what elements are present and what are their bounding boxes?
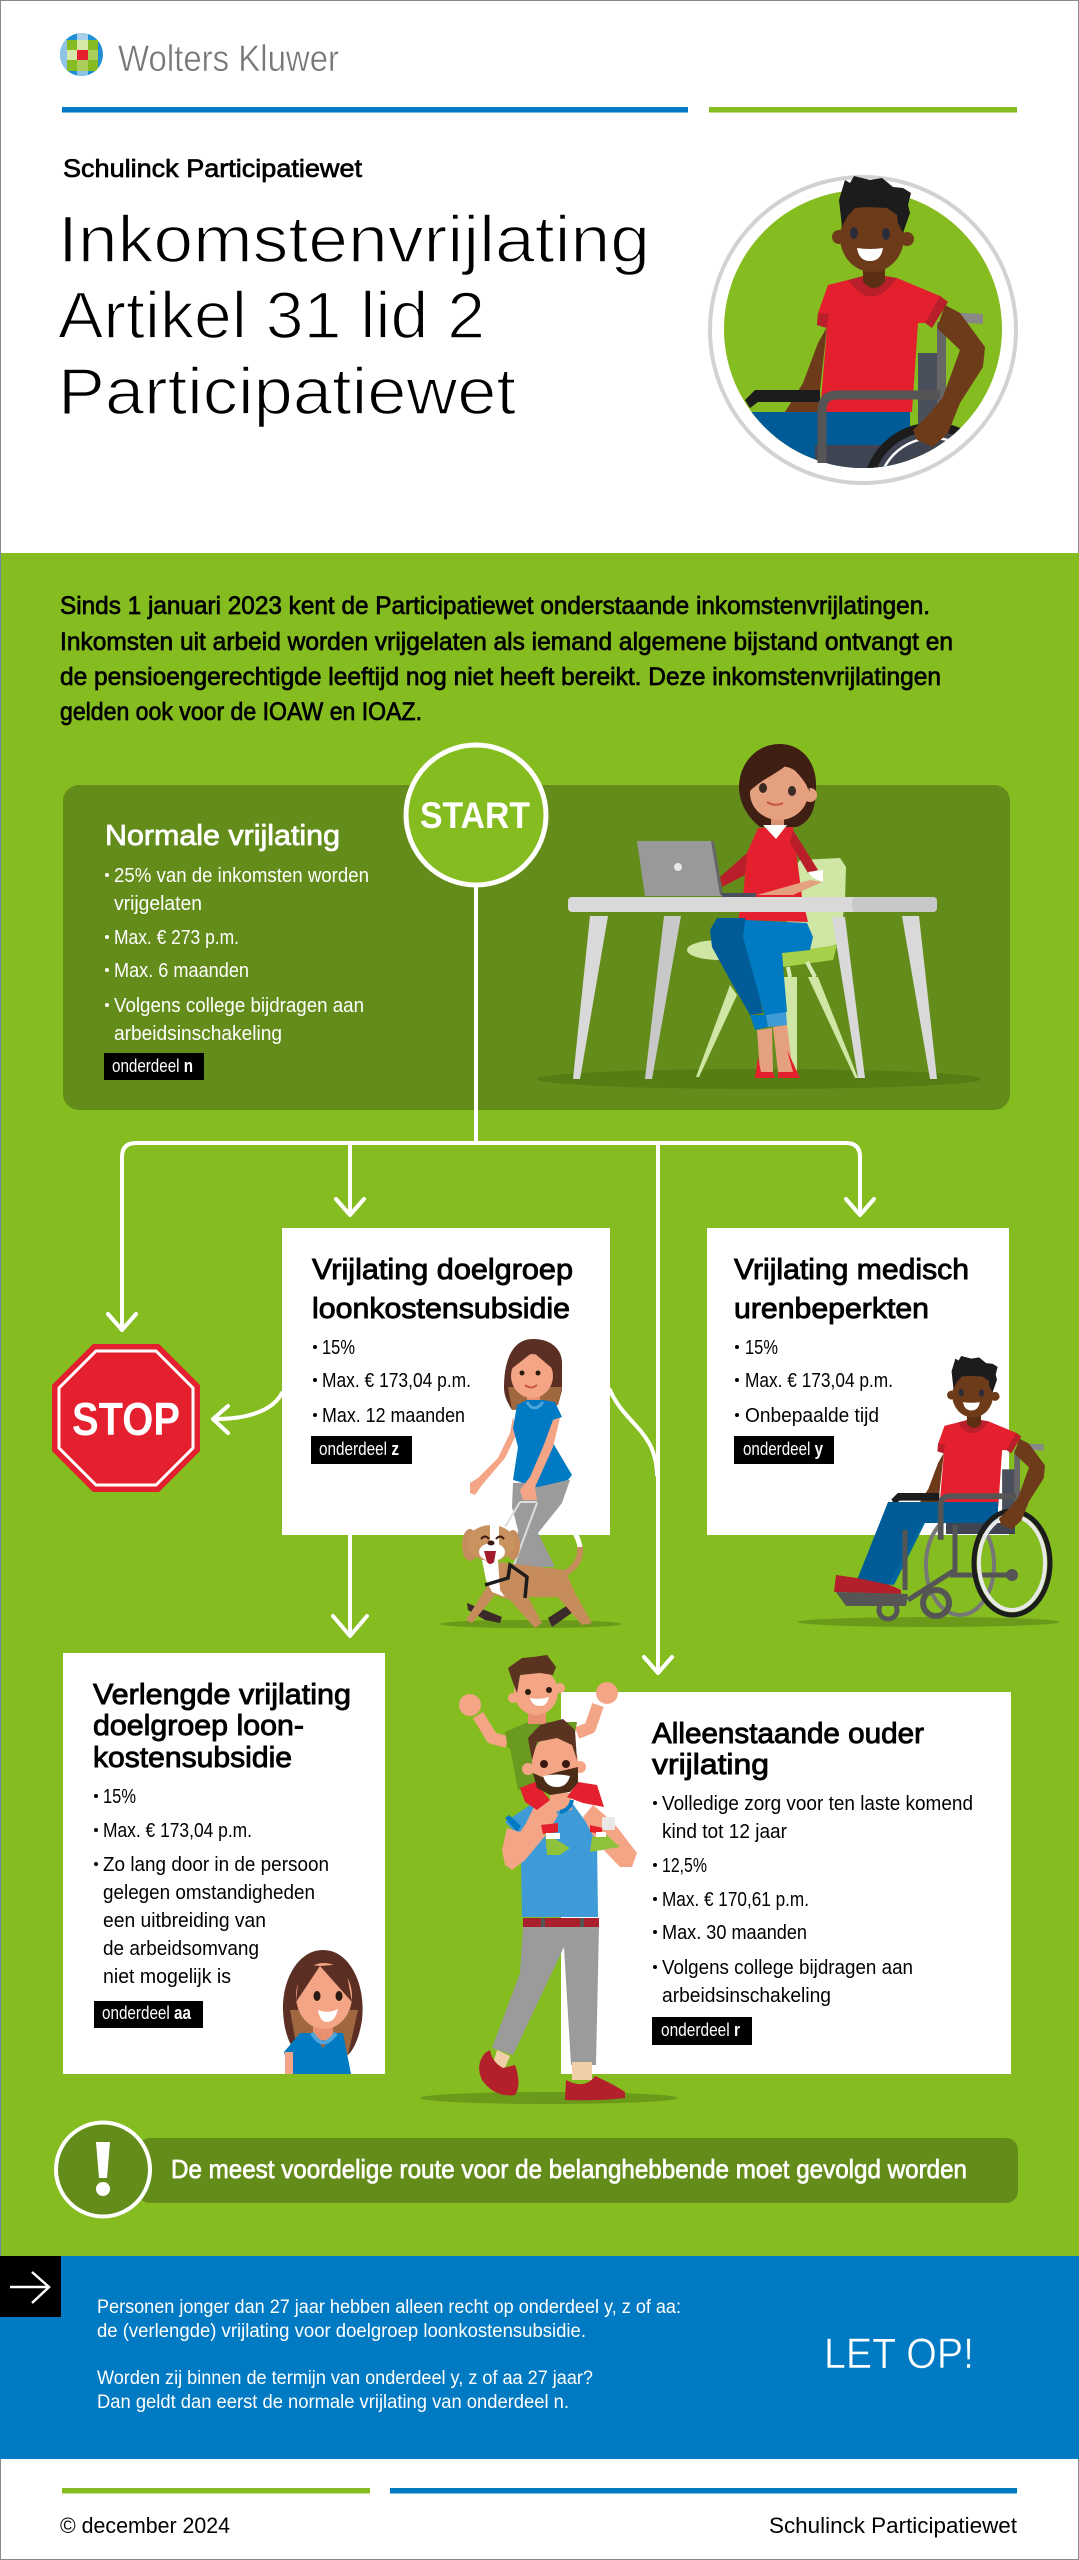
card heading: urenbeperkten	[734, 1293, 929, 1325]
card list: Zo lang door in de persoon	[103, 1854, 329, 1876]
card heading: Vrijlating doelgroep	[312, 1254, 573, 1286]
card heading	[93, 1679, 351, 1774]
badge: onderdeel r	[652, 2017, 752, 2045]
icon: logo globe	[60, 33, 104, 77]
illustration: father with son on shoulders	[420, 1655, 678, 2104]
badge: onderdeel z	[311, 1436, 412, 1464]
card: verlengde vrijlating	[63, 1653, 385, 2074]
list: normale vrijlating: Max. 6 maanden	[114, 960, 249, 982]
card list: Max. 30 maanden	[662, 1922, 807, 1944]
card heading: Verlengde vrijlating	[93, 1679, 351, 1711]
list: normale vrijlating: Max. € 273 p.m.	[114, 927, 239, 949]
badge: onderdeel r: onderdeel r	[661, 2020, 740, 2040]
start circle	[406, 745, 546, 885]
card list: 12,5%	[662, 1855, 707, 1877]
card heading	[734, 1254, 969, 1325]
start circle: START	[420, 795, 530, 836]
list: normale vrijlating: arbeidsinschakeling	[114, 1023, 282, 1045]
arrow: to alleenstaande ouder	[644, 1657, 672, 1673]
card list: Volgens college bijdragen aan	[662, 1957, 913, 1979]
card: vrijlating doelgroep loonkostensubsidie	[282, 1228, 610, 1535]
illustration: woman with guide dog	[440, 1339, 622, 1628]
list: normale vrijlating	[105, 865, 369, 1045]
panel: normale vrijlating	[63, 785, 1010, 1110]
card heading: loonkostensubsidie	[312, 1293, 570, 1325]
let op text: de (verlengde) vrijlating voor doelgroep loonkostensubsidie.	[97, 2321, 586, 2342]
notice text: De meest voordelige route voor de belanghebbende moet gevolgd worden	[171, 2154, 967, 2184]
portrait: man in wheelchair in circle	[708, 175, 1018, 485]
card heading	[312, 1254, 573, 1325]
let op heading: LET OP!	[824, 2330, 974, 2378]
card list: arbeidsinschakeling	[662, 1985, 831, 2007]
flow curve to alleenstaande ouder	[610, 1390, 657, 1475]
badge: onderdeel y	[734, 1436, 834, 1464]
card list: een uitbreiding van	[103, 1910, 266, 1932]
title	[58, 202, 650, 428]
badge: onderdeel n	[104, 1053, 204, 1080]
card heading: doelgroep loon-	[93, 1710, 304, 1742]
card list: gelegen omstandigheden	[103, 1882, 315, 1904]
arrow: to medisch urenbeperkten	[846, 1199, 874, 1215]
badge: onderdeel z: onderdeel z	[319, 1439, 399, 1459]
list: normale vrijlating: vrijgelaten	[114, 893, 202, 915]
stop sign	[52, 1344, 200, 1492]
card list: Max. 12 maanden	[322, 1405, 465, 1427]
card heading	[652, 1718, 924, 1781]
card list	[313, 1337, 471, 1427]
card list	[735, 1337, 893, 1427]
header background	[0, 0, 1079, 553]
card list	[94, 1786, 329, 1988]
green main section	[0, 553, 1079, 2256]
card list: 15%	[322, 1337, 355, 1359]
header rule green	[709, 107, 1017, 112]
flow lines from start	[122, 886, 860, 1671]
card: alleenstaande ouder	[561, 1692, 1011, 2074]
let op text: Personen jonger dan 27 jaar hebben alleen recht op onderdeel y, z of aa:	[97, 2297, 681, 2318]
illustration: woman at desk with laptop	[537, 744, 981, 1089]
footer date: © december 2024	[60, 2513, 230, 2538]
illustration: girl portrait	[283, 1950, 363, 2074]
arrow: to doelgroep loonkostensubsidie	[336, 1199, 364, 1215]
blue panel: let op	[0, 2256, 1079, 2459]
heading: normale vrijlating: Normale vrijlating	[105, 820, 340, 852]
card list: 15%	[745, 1337, 778, 1359]
card list: kind tot 12 jaar	[662, 1821, 787, 1843]
card heading: kostensubsidie	[93, 1742, 292, 1774]
let op text: Dan geldt dan eerst de normale vrijlating van onderdeel n.	[97, 2392, 569, 2413]
logo: Wolters Kluwer	[60, 33, 339, 79]
badge: onderdeel aa: onderdeel aa	[102, 2003, 192, 2023]
notice bar	[56, 2122, 1018, 2216]
subtitle: Schulinck Participatiewet	[63, 155, 362, 183]
title: Inkomstenvrijlating	[58, 202, 650, 276]
card list	[653, 1793, 973, 2007]
card list: 15%	[103, 1786, 136, 1808]
footer rule blue	[390, 2488, 1017, 2494]
let op text: Worden zij binnen de termijn van onderdeel y, z of aa 27 jaar?	[97, 2368, 593, 2389]
card list: Max. € 173,04 p.m.	[745, 1370, 893, 1392]
card list: Onbepaalde tijd	[745, 1405, 879, 1427]
title: Participatiewet	[58, 354, 516, 428]
footer source: Schulinck Participatiewet	[769, 2513, 1017, 2538]
card list: de arbeidsomvang	[103, 1938, 259, 1960]
list: normale vrijlating: Volgens college bijdragen aan	[114, 995, 364, 1017]
let op text	[97, 2297, 681, 2413]
badge: onderdeel aa	[94, 2001, 203, 2028]
header rule blue	[62, 107, 688, 112]
intro text: Inkomsten uit arbeid worden vrijgelaten als iemand algemene bijstand ontvangt en	[60, 628, 953, 656]
stop sign: STOP	[72, 1393, 180, 1445]
title: Artikel 31 lid 2	[58, 278, 485, 352]
icon: arrow tab	[0, 2256, 61, 2317]
card: vrijlating medisch urenbeperkten	[707, 1228, 1009, 1535]
card list: Max. € 170,61 p.m.	[662, 1889, 809, 1911]
intro text: gelden ook voor de IOAW en IOAZ.	[60, 698, 422, 726]
arrow: to verlengde vrijlating	[333, 1535, 367, 1636]
card heading: Vrijlating medisch	[734, 1254, 969, 1286]
card list: Max. € 173,04 p.m.	[322, 1370, 471, 1392]
card list: niet mogelijk is	[103, 1966, 231, 1988]
intro text: de pensioengerechtigde leeftijd nog niet heeft bereikt. Deze inkomstenvrijlatingen	[60, 663, 941, 691]
arrow: curve to stop	[213, 1393, 282, 1433]
list: normale vrijlating: 25% van de inkomsten worden	[114, 865, 369, 887]
card list: Max. € 173,04 p.m.	[103, 1820, 252, 1842]
icon: exclamation circle	[56, 2122, 150, 2216]
intro text	[60, 592, 953, 726]
intro text: Sinds 1 januari 2023 kent de Participatiewet onderstaande inkomstenvrijlatingen.	[60, 592, 930, 620]
arrow: to stop	[108, 1314, 136, 1330]
illustration: man in wheelchair	[798, 1356, 1060, 1627]
badge: onderdeel n: onderdeel n	[112, 1056, 193, 1076]
card list: Volledige zorg voor ten laste komend	[662, 1793, 973, 1815]
footer rule green	[62, 2488, 370, 2494]
card heading: Alleenstaande ouder	[652, 1718, 924, 1750]
card heading: vrijlating	[652, 1749, 769, 1781]
badge: onderdeel y: onderdeel y	[743, 1439, 823, 1459]
logo wordmark: Wolters Kluwer	[118, 38, 339, 79]
